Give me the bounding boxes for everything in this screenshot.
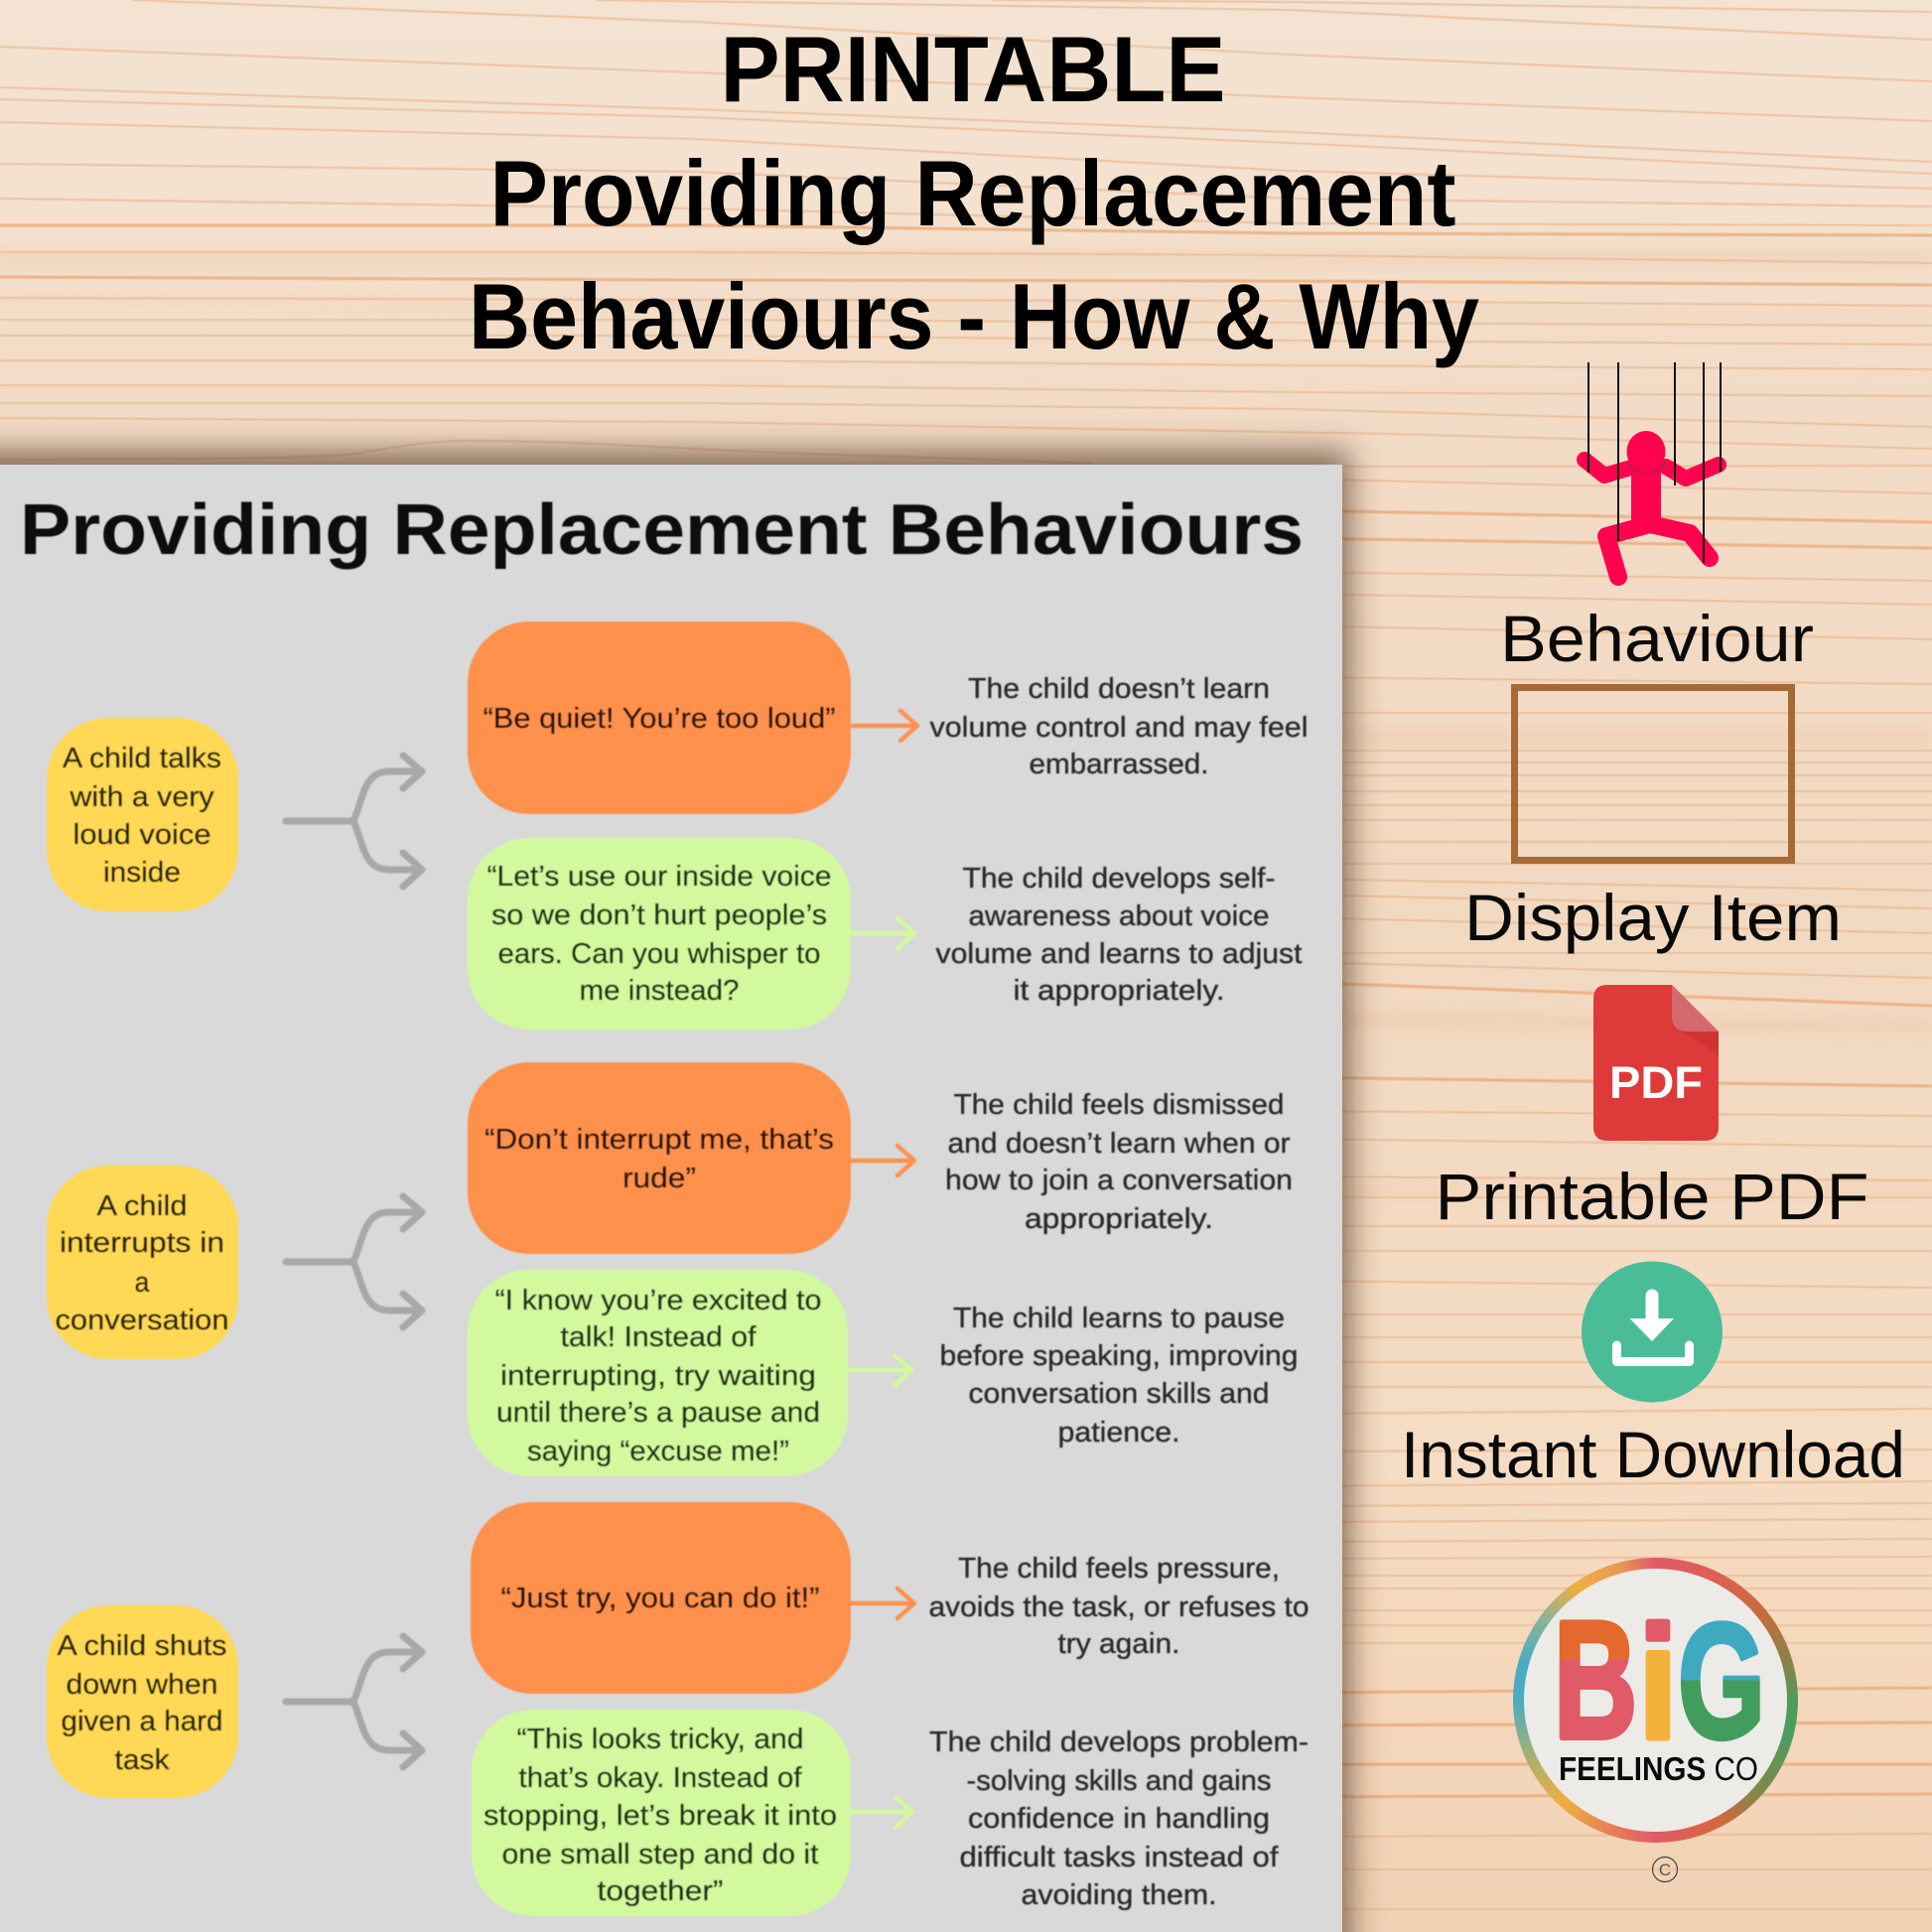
replacement response 2 bbox=[468, 1270, 848, 1476]
outcome text 4: before speaking, improving bbox=[939, 1340, 1299, 1372]
icon: marionette puppet bbox=[1585, 362, 1721, 577]
outcome text 6: avoiding them. bbox=[1021, 1879, 1217, 1911]
replacement response 1: so we don’t hurt people’s bbox=[491, 899, 827, 931]
unhelpful response 3 bbox=[471, 1502, 851, 1694]
row 3: hard task bbox=[47, 1502, 1309, 1916]
outcome text 6: The child develops problem- bbox=[929, 1726, 1309, 1758]
icon: pdf file bbox=[1593, 985, 1719, 1141]
behaviour box 1 bbox=[47, 718, 238, 911]
outcome text 3: and doesn’t learn when or bbox=[947, 1128, 1291, 1160]
copyright mark bbox=[1652, 1857, 1678, 1882]
unhelpful response 1: “Be quiet! You’re too loud” bbox=[483, 703, 836, 735]
outcome text 5: try again. bbox=[1058, 1628, 1179, 1660]
replacement response 3: one small step and do it bbox=[502, 1839, 818, 1870]
behaviour box 2: A child bbox=[97, 1190, 187, 1222]
outcome text 2: awareness about voice bbox=[969, 900, 1269, 932]
outcome text 6 bbox=[929, 1726, 1309, 1911]
arrow orange 2 bbox=[851, 1146, 914, 1175]
outcome text 1 bbox=[929, 673, 1309, 780]
outcome text 1: embarrassed. bbox=[1029, 749, 1209, 780]
behaviour box 3: down when bbox=[66, 1669, 218, 1701]
outcome text 2 bbox=[935, 863, 1303, 1007]
outcome text 3: appropriately. bbox=[1025, 1203, 1213, 1235]
label: behaviour: Behaviour bbox=[1500, 602, 1814, 675]
outcome text 4 bbox=[939, 1303, 1299, 1449]
logo: big feelings co bbox=[1513, 1558, 1798, 1843]
panel: printable preview bbox=[0, 465, 1342, 1932]
icon: download bbox=[1582, 1261, 1723, 1402]
arrow orange 3 bbox=[852, 1588, 914, 1618]
replacement response 3: stopping, let’s break it into bbox=[483, 1800, 837, 1832]
replacement response 3: that’s okay. Instead of bbox=[518, 1762, 802, 1794]
unhelpful response 2: rude” bbox=[622, 1163, 696, 1194]
outcome text 2: it appropriately. bbox=[1013, 975, 1225, 1007]
logo wordmark: FEELINGS CO bbox=[1559, 1750, 1758, 1787]
behaviour box 3: given a hard bbox=[62, 1706, 222, 1737]
behaviour box 1: loud voice bbox=[73, 819, 210, 851]
outcome text 3: The child feels dismissed bbox=[953, 1089, 1285, 1121]
replacement response 1 bbox=[468, 838, 851, 1030]
outcome text 4: patience. bbox=[1058, 1417, 1179, 1449]
icon: pdf file: PDF bbox=[1609, 1057, 1703, 1108]
outcome text 5: avoids the task, or refuses to bbox=[929, 1591, 1309, 1623]
arrow green 1 bbox=[851, 918, 914, 949]
behaviour box 2 bbox=[47, 1166, 238, 1359]
panel shadow bbox=[0, 451, 1350, 1932]
unhelpful response 3: “Just try, you can do it!” bbox=[500, 1583, 820, 1614]
replacement response 3: “This looks tricky, and bbox=[516, 1724, 804, 1755]
copyright mark: C bbox=[1659, 1861, 1671, 1879]
replacement response 2: until there’s a pause and bbox=[496, 1397, 820, 1429]
replacement response 2: “I know you’re excited to bbox=[494, 1285, 822, 1316]
behaviour box 1: with a very bbox=[69, 781, 214, 813]
outcome text 2: The child develops self- bbox=[963, 863, 1275, 895]
label: printable pdf: Printable PDF bbox=[1436, 1160, 1868, 1233]
row 1: loud voice bbox=[47, 621, 1309, 1030]
arrow green 2 bbox=[848, 1355, 911, 1386]
unhelpful response 2: “Don’t interrupt me, that’s bbox=[484, 1124, 834, 1156]
outcome text 6: difficult tasks instead of bbox=[959, 1842, 1280, 1873]
replacement response 2: saying “excuse me!” bbox=[527, 1436, 789, 1467]
replacement response 1: “Let’s use our inside voice bbox=[486, 861, 832, 893]
outcome text 6: confidence in handling bbox=[968, 1803, 1270, 1835]
logo letter i: i bbox=[1639, 1593, 1677, 1771]
main title: Providing Replacement bbox=[490, 141, 1455, 245]
unhelpful response 2 bbox=[468, 1062, 851, 1254]
outcome text 1: volume control and may feel bbox=[929, 712, 1309, 744]
main title bbox=[469, 17, 1479, 368]
behaviour box 2: conversation bbox=[56, 1305, 228, 1336]
arrow green 3 bbox=[851, 1797, 912, 1828]
row 2: interrupting bbox=[47, 1062, 1299, 1476]
behaviour box 3 bbox=[47, 1605, 238, 1798]
icon: display frame bbox=[1515, 687, 1791, 860]
behaviour box 3: A child shuts bbox=[58, 1630, 226, 1662]
label: display item: Display Item bbox=[1464, 881, 1842, 954]
replacement response 1: ears. Can you whisper to bbox=[498, 938, 820, 970]
behaviour box 1: inside bbox=[103, 857, 181, 889]
outcome text 6: -solving skills and gains bbox=[967, 1765, 1271, 1797]
fork arrow 3 bbox=[286, 1636, 422, 1767]
replacement response 1: me instead? bbox=[580, 975, 739, 1007]
behaviour box 1: A child talks bbox=[63, 743, 221, 774]
outcome text 3: how to join a conversation bbox=[945, 1165, 1293, 1196]
replacement response 3 bbox=[472, 1710, 851, 1916]
outcome text 5 bbox=[929, 1553, 1309, 1660]
fork arrow 1 bbox=[286, 756, 422, 887]
outcome text 1: The child doesn’t learn bbox=[968, 673, 1270, 705]
replacement response 2: talk! Instead of bbox=[560, 1321, 757, 1353]
behaviour box 2: a bbox=[135, 1267, 150, 1299]
label: instant download: Instant Download bbox=[1401, 1418, 1905, 1491]
replacement response 3: together” bbox=[598, 1875, 723, 1907]
outcome text 3 bbox=[945, 1089, 1293, 1235]
behaviour box 3: task bbox=[115, 1744, 170, 1776]
outcome text 5: The child feels pressure, bbox=[958, 1553, 1280, 1585]
outcome text 4: The child learns to pause bbox=[953, 1303, 1285, 1334]
replacement response 2: interrupting, try waiting bbox=[500, 1360, 816, 1392]
fork arrow 2 bbox=[286, 1196, 422, 1327]
panel heading: Providing Replacement Behaviours bbox=[20, 490, 1304, 570]
arrow orange 1 bbox=[853, 711, 917, 741]
main title: Behaviours - How & Why bbox=[469, 264, 1479, 368]
logo letter B: B bbox=[1554, 1587, 1637, 1773]
unhelpful response 1 bbox=[468, 621, 851, 814]
outcome text 2: volume and learns to adjust bbox=[935, 938, 1303, 970]
outcome text 4: conversation skills and bbox=[969, 1378, 1269, 1410]
behaviour box 2: interrupts in bbox=[60, 1227, 224, 1259]
main title: PRINTABLE bbox=[721, 17, 1225, 121]
